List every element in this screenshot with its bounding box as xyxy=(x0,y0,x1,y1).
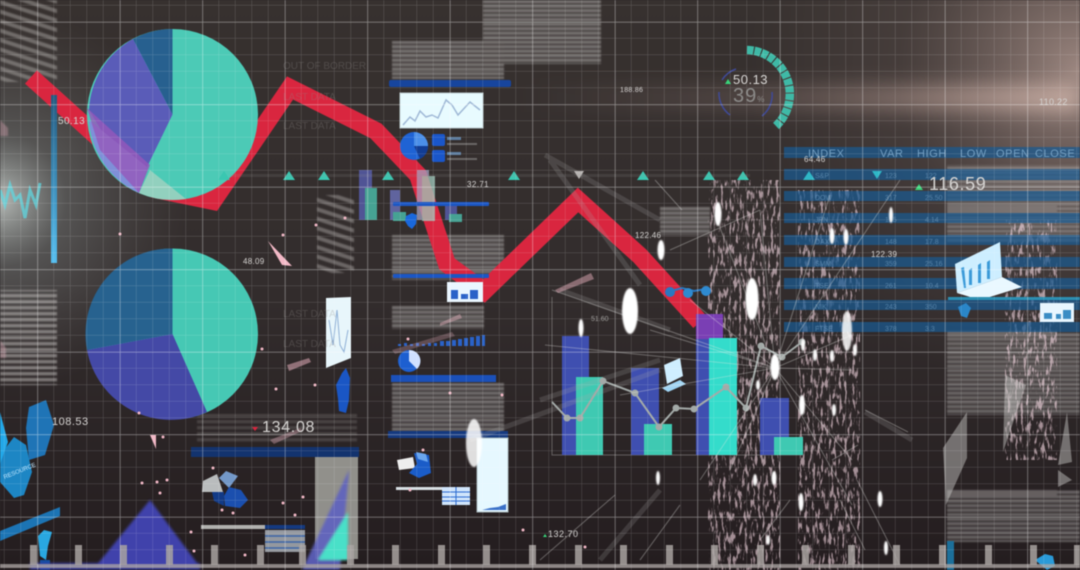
donut icon xyxy=(397,452,431,478)
label 188.86: 188.86 xyxy=(620,87,643,94)
small pie lower xyxy=(398,350,420,372)
label 50.13: 50.13 xyxy=(58,116,85,127)
faint labels xyxy=(283,61,366,350)
label 32.71: 32.71 xyxy=(467,180,489,189)
table values: DAX xyxy=(815,239,830,246)
table values: TSE xyxy=(815,283,829,290)
bar chart with line overlay xyxy=(552,297,806,455)
bottom timeline axis xyxy=(0,545,1080,568)
faint labels: LAST DATA xyxy=(283,309,336,320)
table values: 25.50 xyxy=(925,195,943,202)
group 3 xyxy=(696,314,737,455)
table values: 25.16 xyxy=(925,261,943,268)
group 2 xyxy=(631,368,672,455)
teal progress arc xyxy=(747,50,790,126)
navy header xyxy=(191,447,359,457)
table headers: CLOSE xyxy=(1035,148,1075,160)
pie chart: top xyxy=(87,29,258,200)
circular gauge xyxy=(719,50,790,126)
panel: centre dashboard column xyxy=(359,80,511,512)
white tall card xyxy=(477,438,508,512)
table values: 148 xyxy=(885,239,897,246)
panel: right text blocks xyxy=(947,165,1080,542)
label 64.46: 64.46 xyxy=(804,155,826,164)
panel: lower left dashboard xyxy=(191,61,366,559)
faint labels: LAST DATA xyxy=(283,121,336,132)
gauge percent: 39% xyxy=(733,85,765,107)
donut chart xyxy=(202,471,248,508)
table headers: OPEN xyxy=(996,148,1030,160)
group 4 xyxy=(760,398,803,455)
small blue icon xyxy=(405,213,417,229)
faint labels: LAST DATA xyxy=(283,92,336,103)
label 110.22: 110.22 xyxy=(1039,97,1068,107)
table values: 317 xyxy=(885,195,897,202)
indigo ring xyxy=(719,69,772,116)
indigo triangle and teal spikes xyxy=(30,470,349,570)
label 132.70: 132.70 xyxy=(548,529,579,539)
gauge up arrow xyxy=(725,79,731,84)
gray card xyxy=(315,457,358,559)
label 48.09: 48.09 xyxy=(243,257,265,266)
label 134.08: 134.08 xyxy=(262,419,315,436)
table xyxy=(201,525,305,552)
hexagon icons xyxy=(0,400,60,570)
table values: 350 xyxy=(925,304,937,311)
red trend line xyxy=(31,77,700,322)
label 122.39: 122.39 xyxy=(871,250,898,259)
panel: left text stripes xyxy=(0,0,57,385)
data table xyxy=(784,147,1080,333)
table headers xyxy=(808,148,1075,160)
label 108.53: 108.53 xyxy=(52,416,89,428)
bright white particles xyxy=(466,202,893,555)
table values: FTSE xyxy=(815,326,833,333)
white line chart card xyxy=(400,93,483,128)
label 122.46: 122.46 xyxy=(635,231,662,240)
small pie xyxy=(400,132,428,160)
legend icons xyxy=(432,134,477,162)
white skewed card xyxy=(326,297,351,368)
group 1 xyxy=(562,336,603,455)
table headers: INDEX xyxy=(808,148,845,160)
white bar card xyxy=(447,282,483,302)
table values: 3.3 xyxy=(925,326,935,333)
gray wire polygons xyxy=(943,375,1072,505)
table values: 359 xyxy=(885,261,897,268)
table values: 261 xyxy=(885,283,897,290)
side blue gauge bar xyxy=(51,95,57,263)
faint labels: OUT OF BORDER xyxy=(283,61,366,72)
table headers: VAR xyxy=(880,148,904,160)
line series xyxy=(552,338,806,430)
blue molecule and laptop icon on chart xyxy=(662,286,711,392)
blue divider bars xyxy=(393,202,489,278)
table headers: HIGH xyxy=(917,148,947,160)
label 51.60: 51.60 xyxy=(591,316,609,323)
faded bar chart xyxy=(359,170,462,222)
pink network texture xyxy=(708,180,1057,570)
floating number labels xyxy=(52,87,1068,539)
faint labels: LAST DATA xyxy=(283,339,336,350)
table values: SMM xyxy=(815,261,832,268)
wide gray rays xyxy=(470,155,912,560)
table headers: LOW xyxy=(960,148,987,160)
hexagon icons: RESOURCE xyxy=(3,463,37,481)
table values: 123 xyxy=(885,173,897,180)
mini table xyxy=(396,487,470,505)
pie chart: bottom xyxy=(85,248,258,420)
table values: 122 xyxy=(925,173,937,180)
table values: JPN xyxy=(815,217,828,224)
table values xyxy=(815,173,943,333)
label 116.59: 116.59 xyxy=(929,174,986,194)
table values: NIK xyxy=(815,304,827,311)
table values: DOW xyxy=(815,195,832,202)
blue bar lower xyxy=(391,375,496,382)
table values: 155 xyxy=(885,217,897,224)
table values: 17.8 xyxy=(925,239,939,246)
radiating white lines xyxy=(540,180,908,565)
cyan spectrum xyxy=(0,183,40,218)
panel: top centre text blocks xyxy=(197,0,710,444)
navy header bar xyxy=(388,431,508,438)
blue header bar xyxy=(389,80,511,87)
table rows xyxy=(784,147,1080,332)
table triangles xyxy=(803,171,882,180)
gauge value: 50.13 xyxy=(733,72,768,87)
table values: 10.4 xyxy=(925,283,939,290)
table values: 4.14 xyxy=(925,217,939,224)
teal triangle row xyxy=(218,171,750,180)
table values: S&P xyxy=(815,173,829,180)
pink specks xyxy=(118,216,594,556)
laptop icon right xyxy=(955,242,1022,300)
cyan band and white card right xyxy=(947,297,1080,570)
blue bars icon xyxy=(336,368,350,413)
ascending mini bars xyxy=(398,335,485,346)
table values: 243 xyxy=(885,304,897,311)
table values: 378 xyxy=(885,326,897,333)
